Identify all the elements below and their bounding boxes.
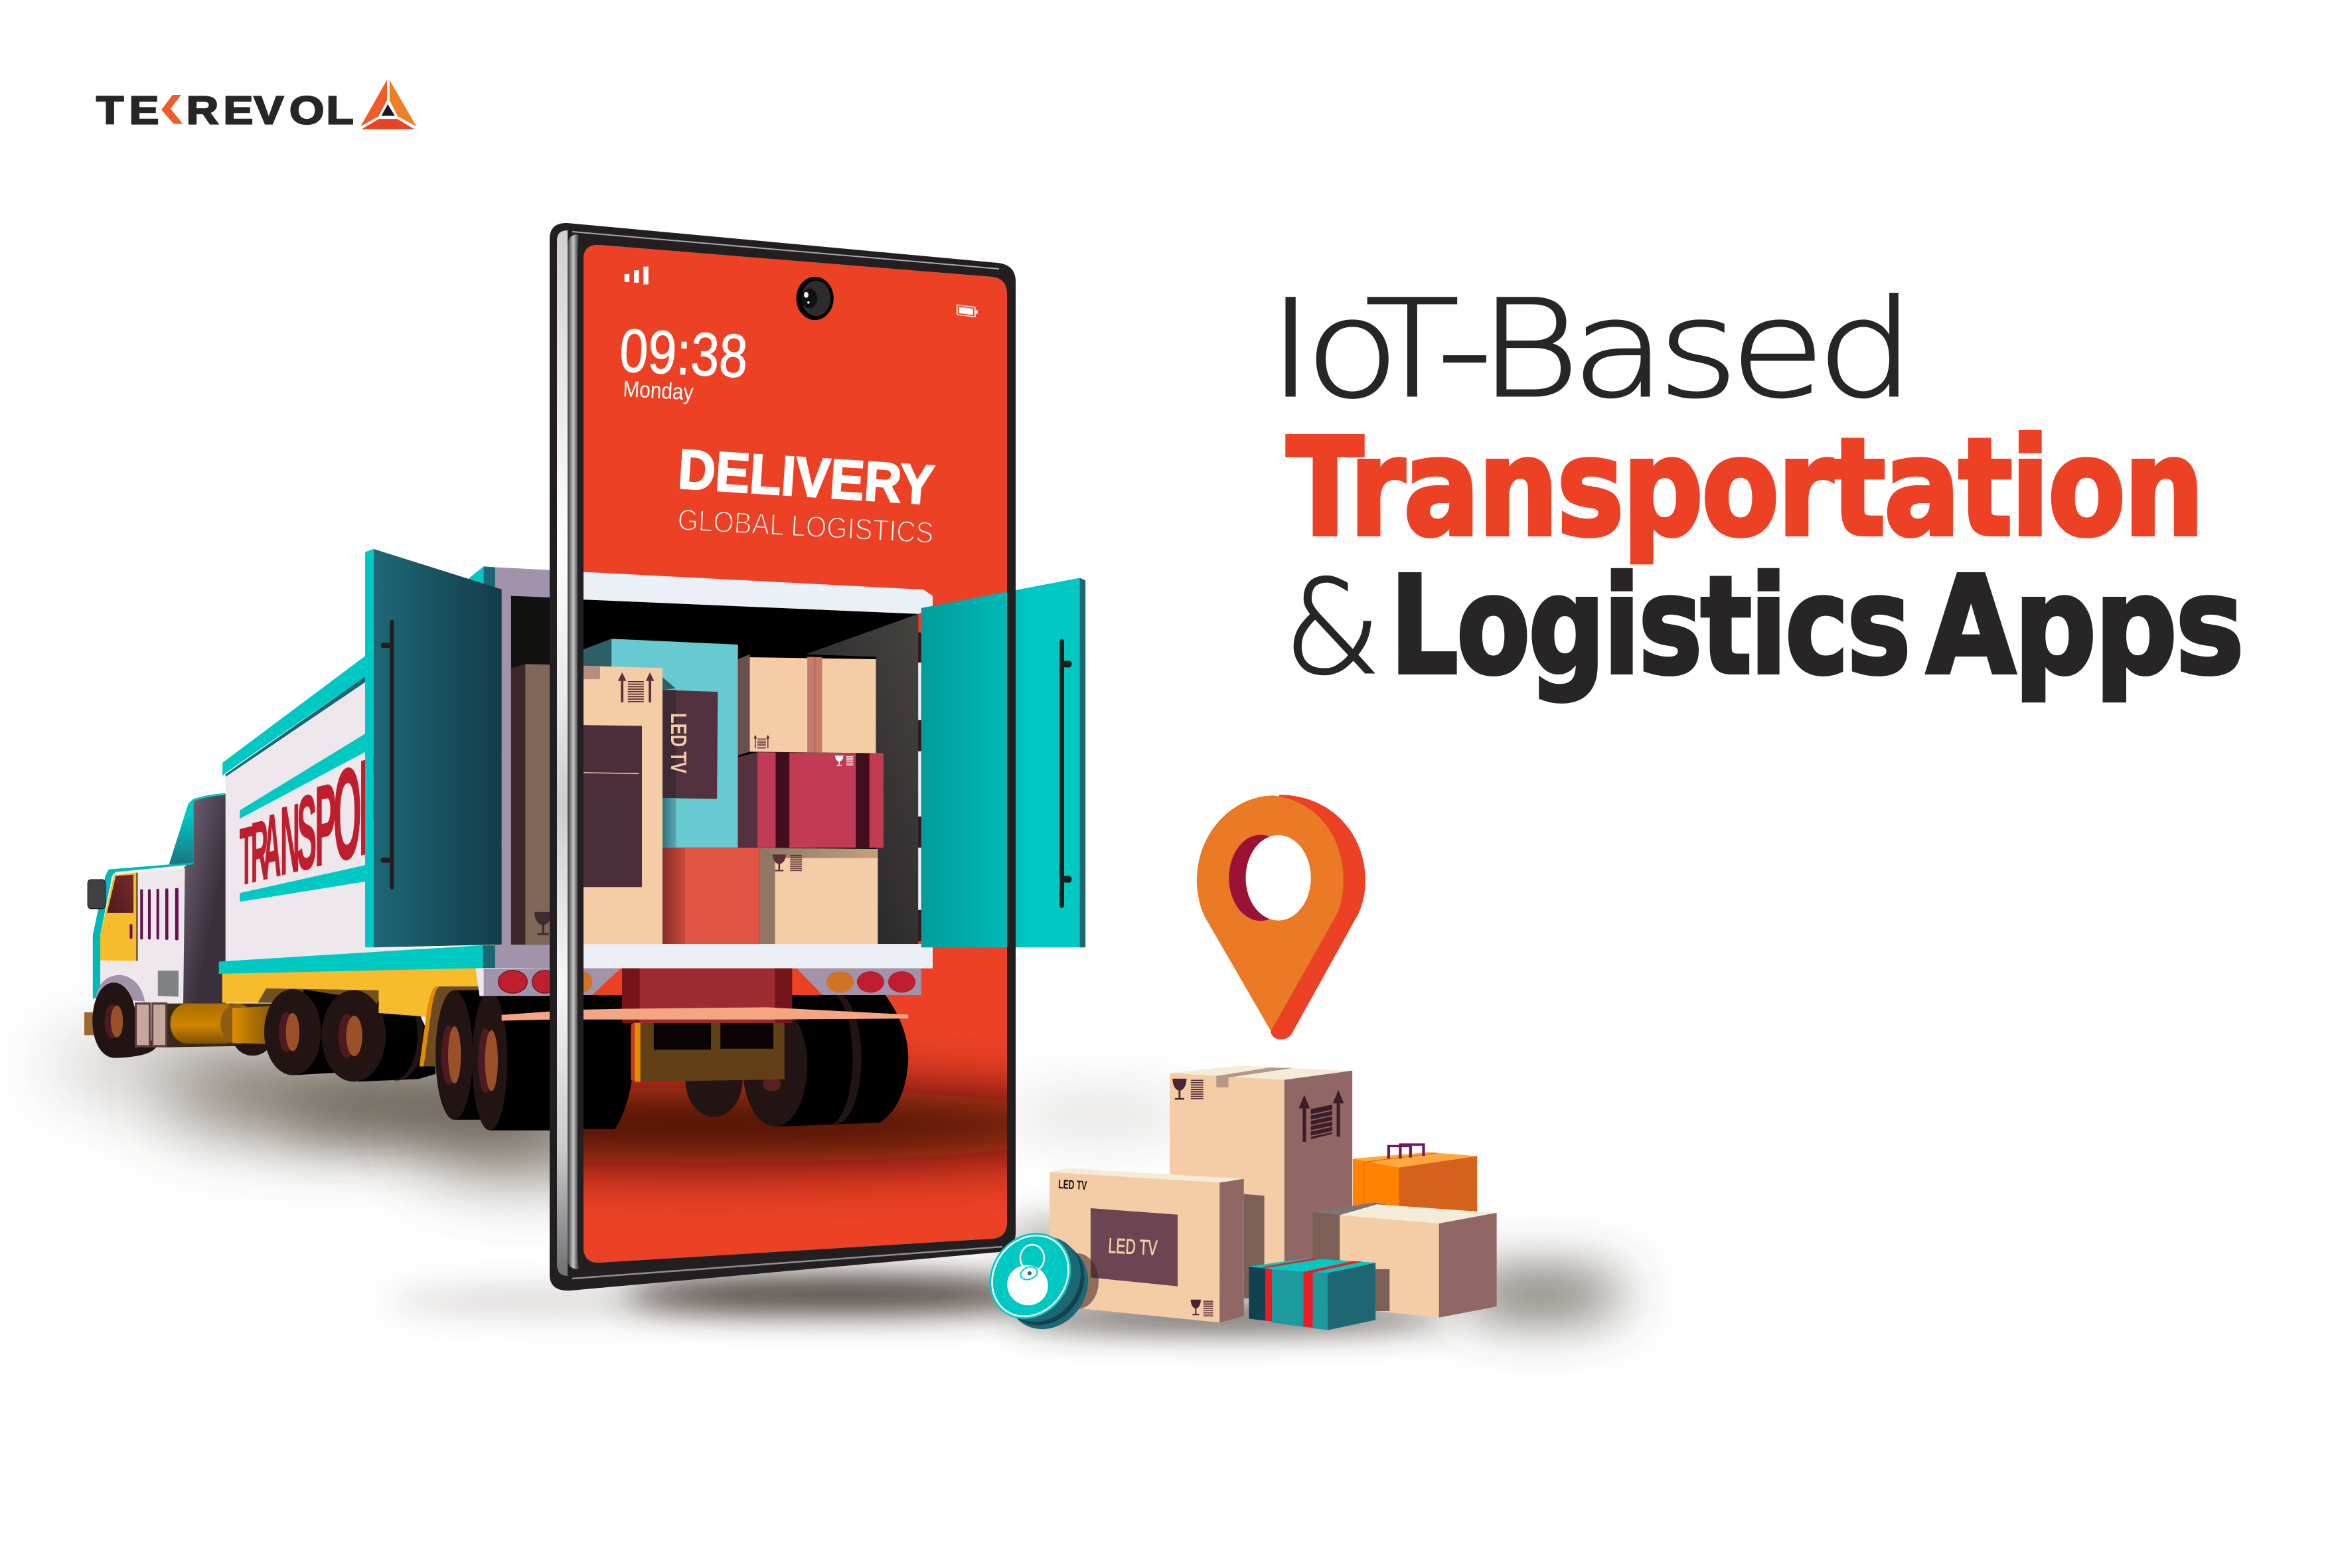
coin shadow on box	[1056, 1253, 1099, 1309]
peach plate	[577, 1007, 908, 1020]
cab door	[100, 872, 138, 961]
shadow on tall box	[1244, 1194, 1265, 1298]
orange box side	[662, 848, 685, 944]
bumper plates	[136, 1004, 167, 1046]
teal box label wedge	[662, 677, 676, 690]
title line 1: IoT-Based	[1268, 271, 1907, 428]
trailer lettering: N	[280, 783, 300, 896]
hitch bar	[84, 1012, 98, 1035]
this-way-up arrows	[618, 672, 654, 702]
tall beige box	[577, 666, 662, 944]
crimson side	[738, 752, 757, 848]
rear bumper	[475, 968, 554, 996]
pin face	[1197, 795, 1344, 1031]
title line 3 word 2: Apps	[1926, 548, 2242, 704]
cargo box front	[525, 664, 554, 945]
box tape	[577, 666, 600, 679]
front wheel	[92, 982, 156, 1058]
delivery heading: DELIVERY	[676, 437, 936, 516]
LED TV box caption: LED TV	[1058, 1178, 1087, 1193]
reflector	[631, 1024, 635, 1080]
fragile mark	[534, 912, 552, 935]
hinge strip	[918, 663, 921, 910]
door handle	[129, 924, 132, 939]
rear wheels	[435, 990, 554, 1131]
LED TV side label: LED TV	[666, 713, 691, 773]
orange box	[685, 848, 759, 944]
teal gift box	[1249, 1258, 1375, 1330]
trailer stripe bottom	[240, 865, 365, 902]
orange suitcase	[1353, 1144, 1477, 1214]
status bars	[625, 267, 649, 284]
tail lights	[499, 971, 558, 993]
cab body	[100, 868, 185, 1004]
far tyres	[577, 992, 908, 1129]
tan box tape	[807, 657, 822, 752]
bumper left	[577, 969, 621, 995]
logo wordmark: TEKREVOL	[96, 89, 354, 133]
trailer floor end	[483, 945, 495, 968]
cab sleeper	[183, 794, 226, 1004]
logo: TekRevol	[96, 80, 416, 133]
rear frame	[495, 567, 554, 968]
trailer lettering: R	[251, 802, 268, 901]
truck: left side	[84, 566, 558, 1131]
LED TV box panel label: LED TV	[1108, 1233, 1158, 1260]
tan box side	[738, 655, 749, 755]
top highlight	[572, 232, 999, 269]
fuel tank	[171, 1004, 272, 1044]
rear sill	[577, 944, 933, 969]
left door	[365, 549, 502, 947]
logo triangle mark	[360, 80, 416, 129]
ampersand: &	[1284, 552, 1381, 703]
mudguard	[420, 986, 487, 1066]
LED TV box	[1050, 1168, 1244, 1322]
trailer roof stripe	[222, 656, 365, 776]
door hinges	[918, 633, 921, 941]
battery icon	[957, 305, 978, 317]
cargo box side	[511, 664, 525, 945]
lower box icons	[773, 854, 802, 871]
windshield frame	[93, 862, 193, 998]
truck rear on screen	[573, 572, 933, 1129]
crimson icons	[835, 755, 853, 766]
title	[1268, 271, 2242, 704]
door edge	[136, 873, 138, 961]
trailer floor stripe	[219, 945, 483, 974]
metal edge	[568, 234, 579, 1269]
trailer roof shade	[226, 676, 365, 777]
pin side	[1271, 795, 1365, 1040]
padlock coin	[973, 1217, 1105, 1345]
top rail	[577, 572, 933, 614]
teal lower side	[662, 798, 676, 848]
chassis shadow	[167, 1004, 273, 1048]
lights	[573, 971, 915, 992]
lower tan side	[759, 848, 775, 944]
screen shadow	[279, 1088, 1129, 1162]
teal box side	[584, 639, 611, 666]
logo chevron	[161, 95, 183, 124]
axle stripe	[635, 1023, 641, 1082]
cargo interior	[511, 595, 554, 945]
trailer stripe top	[240, 734, 365, 819]
wheel arch	[95, 975, 145, 1002]
right door	[921, 578, 1085, 947]
axle box	[635, 1023, 785, 1082]
title line 3 word 1: Logistics	[1390, 548, 1909, 704]
roof fairing	[169, 793, 226, 864]
pin hole shade	[1229, 834, 1292, 921]
small arrows	[753, 735, 769, 749]
bumper right	[797, 969, 921, 995]
bumper edge	[475, 969, 484, 996]
right box	[1313, 1202, 1497, 1318]
bezel	[550, 223, 1016, 1291]
trailer lettering: O	[333, 739, 362, 890]
peach plate	[502, 1011, 554, 1021]
global logistics subheading: GLOBAL LOGISTICS	[676, 503, 935, 550]
teal box face	[611, 639, 738, 848]
cab vent	[158, 971, 179, 996]
crimson box	[757, 752, 884, 848]
trailer lettering: S	[297, 771, 317, 894]
top dark corner	[484, 566, 495, 594]
cargo black interior	[584, 599, 918, 944]
location pin	[1197, 795, 1365, 1040]
yellow chassis	[222, 968, 479, 1017]
upper tan box	[749, 657, 876, 753]
screen background	[578, 239, 1016, 1268]
lower tan top	[759, 848, 878, 858]
trailer lettering: A	[263, 794, 281, 900]
mud flap	[622, 969, 792, 1023]
camera	[797, 277, 834, 320]
trailer lettering: T	[240, 810, 254, 903]
LED TV label side	[662, 690, 718, 799]
mirror	[88, 880, 106, 909]
phone frame	[550, 223, 1016, 1291]
label shade	[662, 690, 676, 798]
clock: 09:38	[618, 317, 749, 390]
bottom highlight	[572, 1247, 1002, 1279]
box dark panel	[577, 725, 642, 887]
flap sides	[622, 969, 792, 1023]
drive wheels	[264, 989, 435, 1081]
trailer side panel	[226, 682, 483, 962]
top teal corner	[469, 566, 484, 590]
phone screen	[584, 245, 1007, 1263]
far wheel	[232, 1016, 273, 1056]
right inner wall	[805, 614, 918, 944]
day: Monday	[623, 376, 694, 406]
tall box	[1170, 1065, 1352, 1271]
trailer lettering: P	[315, 757, 336, 891]
lower tan box	[775, 858, 878, 944]
crimson straps	[776, 752, 870, 848]
ground shadows	[46, 1043, 1626, 1330]
cab window	[107, 875, 133, 913]
silver edge	[557, 230, 568, 1276]
grille slats	[140, 888, 179, 940]
axle windows	[654, 1023, 773, 1050]
under chassis shade	[258, 988, 380, 1004]
boxes	[1050, 1065, 1497, 1330]
pin hole	[1246, 835, 1311, 921]
trailer lettering: R	[358, 725, 386, 884]
